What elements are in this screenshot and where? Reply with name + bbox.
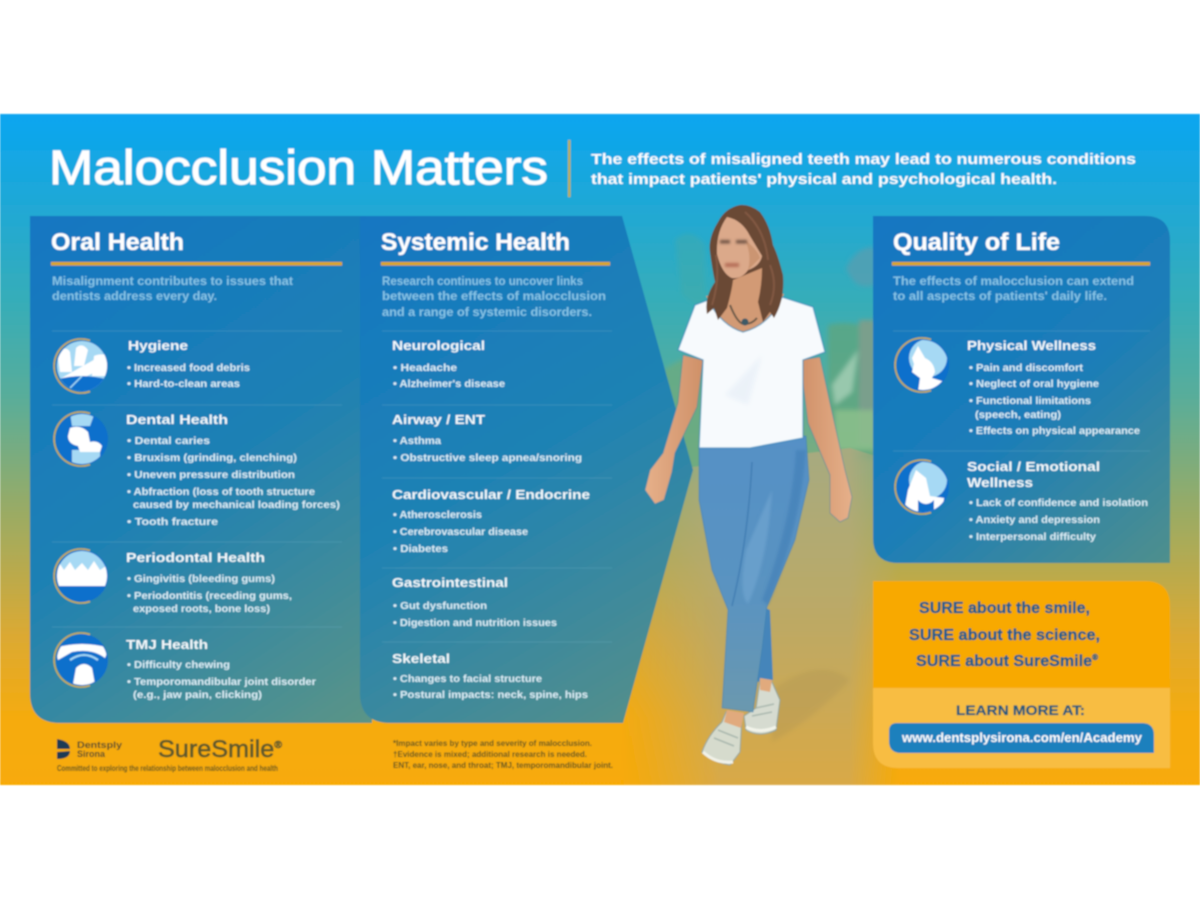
social emotional wellness text: • Lack of confidence and isolation [969,497,1148,509]
header subtitle: that impact patients' physical and psychological health. [591,171,1057,188]
periodontal health text: Periodontal Health [126,550,265,565]
systemic health heading: Systemic Health [381,229,570,256]
logo: dentsply sirona: Sirona [77,749,106,759]
periodontal health text: exposed roots, bone loss) [133,603,270,615]
periodontal health text: • Periodontitis (receding gums, [127,590,292,602]
tagline: Committed to exploring the relationship between malocclusion and health [57,764,278,773]
illustration: walking woman [645,205,852,765]
logo: dentsply sirona [57,739,122,759]
panel: systemic health [360,216,693,723]
systemic health intro [382,274,606,319]
neurological [392,338,505,390]
physical wellness text: • Functional limitations [969,395,1091,407]
background banner [0,114,1200,785]
systemic health intro: Research continues to uncover links [382,274,583,288]
tmj health text [126,637,316,701]
hygiene text: • Hard-to-clean areas [127,378,240,390]
hygiene text [127,338,250,390]
call to action slogan: SURE about SureSmile [916,653,1091,670]
neurological: • Headache [393,362,457,374]
back shoe [744,678,780,734]
oral health intro: Misalignment contributes to issues that [52,274,293,288]
physical wellness text: • Effects on physical appearance [969,425,1140,437]
panel: quality of life [873,216,1170,563]
footnotes: *Impact varies by type and severity of malocclusion. [393,739,592,748]
social emotional wellness text [967,459,1148,543]
url button [889,723,1154,753]
quality of life intro [893,274,1134,303]
dental health text: • Tooth fracture [127,516,218,528]
tmj health text: (e.g., jaw pain, clicking) [133,689,262,701]
skeletal: • Postural impacts: neck, spine, hips [393,689,588,701]
oral health intro: dentists address every day. [52,289,217,303]
icon: periodontal health [54,549,109,603]
dental health text: caused by mechanical loading forces) [133,499,340,511]
neck and chest [706,256,784,336]
airway / ent [392,412,582,464]
call to action slogan [909,600,1100,670]
social emotional wellness text: • Anxiety and depression [969,514,1100,526]
skeletal [392,651,588,701]
cardiovascular / endocrine: • Cerebrovascular disease [393,526,528,538]
social emotional wellness text: Wellness [967,475,1033,490]
systemic health intro: and a range of systemic disorders. [382,305,592,319]
right arm [800,357,852,522]
tmj health text: • Difficulty chewing [127,659,230,671]
icon: dental health [54,412,108,466]
face [717,217,762,278]
hygiene text: Hygiene [128,338,188,353]
gastrointestinal: • Gut dysfunction [393,600,487,612]
call to action slogan: ® [1092,653,1098,662]
logo: suresmile: SureSmile [158,736,269,763]
dental health text: • Uneven pressure distribution [127,469,295,481]
cardiovascular / endocrine: • Diabetes [393,543,448,555]
shirt [678,297,825,448]
left arm [645,355,703,504]
back leg [745,600,773,682]
dental health text: • Bruxism (grinding, clenching) [127,452,297,464]
title: Malocclusion Matters [49,142,548,195]
airway / ent: • Asthma [393,435,441,447]
call to action slogan: SURE about the smile, [919,600,1090,617]
tmj health text: TMJ Health [126,637,208,652]
panel: oral health [30,216,372,723]
tmj health text: • Temporomandibular joint disorder [127,676,316,688]
gastrointestinal [392,575,557,629]
icon: social emotional wellness [895,460,949,514]
eyes and lips [720,240,747,267]
systemic health intro: between the effects of malocclusion [382,289,606,303]
neurological: • Alzheimer's disease [393,378,505,390]
dental health text: • Abfraction (loss of tooth structure [127,486,315,498]
footnotes: ENT, ear, nose, and throat; TMJ, temporomandibular joint. [393,761,613,770]
logo: suresmile: ® [274,740,283,751]
logo: dentsply sirona: Dentsply [77,740,122,750]
icon: tmj health [54,633,109,690]
airway / ent: Airway / ENT [392,412,485,427]
dental health text [126,412,340,528]
cardiovascular / endocrine [392,487,590,555]
physical wellness text: • Neglect of oral hygiene [969,378,1099,390]
url button: www.dentsplysirona.com/en/Academy [901,731,1142,745]
panel: call to action [873,581,1170,768]
dental health text: • Dental caries [127,435,210,447]
hair [706,205,783,322]
neurological: Neurological [392,338,485,353]
periodontal health text: • Gingivitis (bleeding gums) [127,573,275,585]
gastrointestinal: Gastrointestinal [392,575,508,590]
gastrointestinal: • Digestion and nutrition issues [393,617,557,629]
dental health text: Dental Health [126,412,228,427]
social emotional wellness text: • Interpersonal difficulty [969,531,1096,543]
cardiovascular / endocrine: • Atherosclerosis [393,509,482,521]
oral health intro [52,274,293,303]
quality of life intro: to all aspects of patients' daily life. [893,289,1107,303]
airway / ent: • Obstructive sleep apnea/snoring [393,452,582,464]
skeletal: • Changes to facial structure [393,673,542,685]
icon: hygiene [54,339,109,393]
physical wellness text: Physical Wellness [967,338,1096,353]
footnotes: †Evidence is mixed; additional research is needed. [393,750,587,759]
front shoe [702,710,744,765]
icon: physical wellness [895,338,949,392]
background scene: trees and path [621,234,900,786]
periodontal health text [126,550,292,615]
quality of life intro: The effects of malocclusion can extend [893,274,1134,288]
social emotional wellness text: Social / Emotional [967,459,1100,474]
physical wellness text: • Pain and discomfort [969,362,1084,374]
header subtitle: The effects of misaligned teeth may lead to numerous conditions [591,151,1136,168]
cardiovascular / endocrine: Cardiovascular / Endocrine [392,487,590,502]
footnotes [393,739,613,770]
physical wellness text [967,338,1140,437]
quality of life heading: Quality of Life [893,229,1060,256]
physical wellness text: (speech, eating) [975,409,1061,421]
header subtitle [591,151,1136,188]
skeletal: Skeletal [392,651,450,666]
jeans [699,436,809,712]
necklace [730,305,757,324]
learn more label: LEARN MORE AT: [956,702,1085,718]
call to action slogan: SURE about the science, [909,627,1100,644]
header divider [568,140,570,197]
oral health heading: Oral Health [51,229,184,256]
hygiene text: • Increased food debris [127,362,250,374]
